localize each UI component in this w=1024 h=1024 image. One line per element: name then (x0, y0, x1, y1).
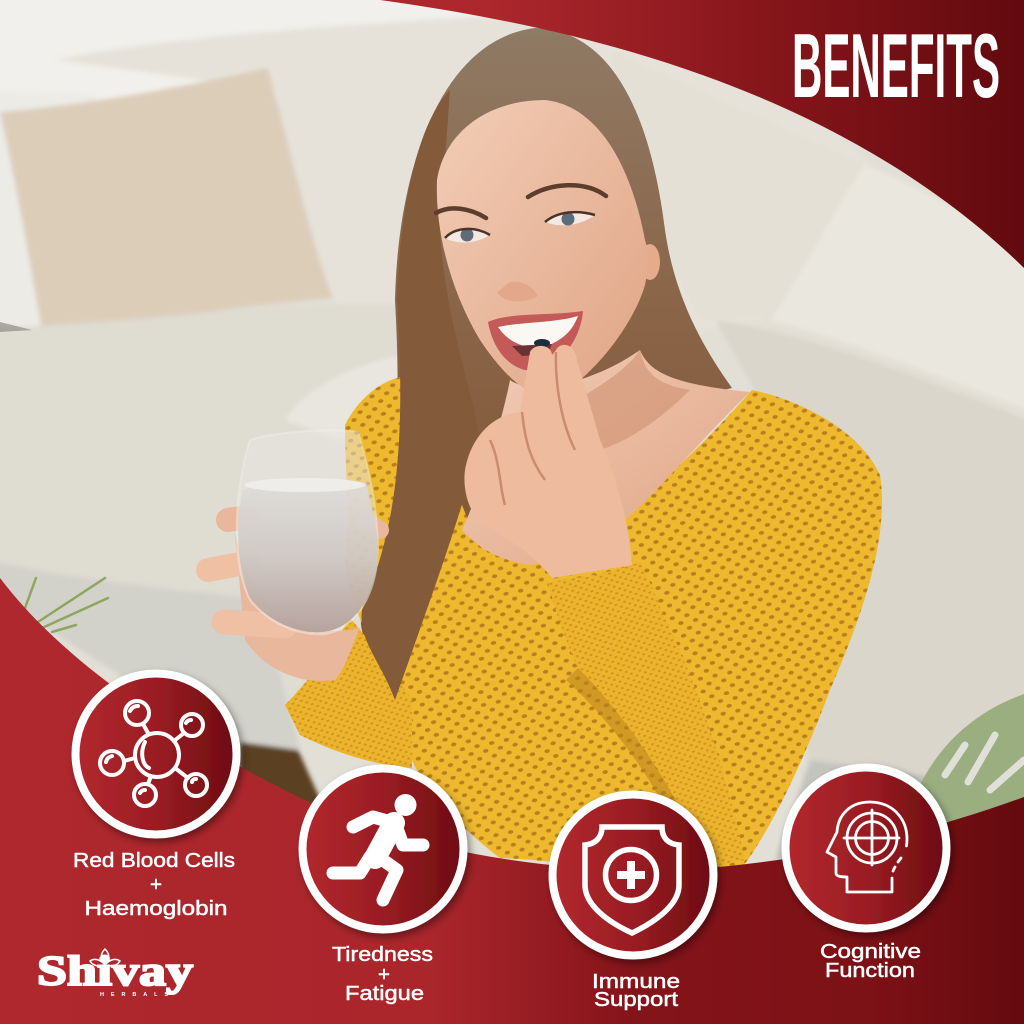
label: Cognitive Function (820, 940, 921, 982)
finger lines (490, 352, 575, 505)
benefit: immune support (552, 794, 714, 1011)
icon: blood cells (100, 701, 207, 806)
label: Red Blood Cells + Haemoglobin: Red Blood Cells (73, 849, 235, 872)
top right red banner (380, 0, 1024, 268)
badge: red blood cells (76, 674, 236, 834)
bottom red wave panel (0, 578, 1024, 1024)
woman (208, 28, 882, 870)
eyebrows (436, 185, 606, 218)
neck and chest (462, 350, 750, 565)
right sleeve cuff (548, 562, 675, 668)
sweater body (345, 375, 882, 870)
label: Tiredness + Fatigue (332, 943, 433, 1005)
icon: running person (333, 794, 423, 900)
label: Tiredness + Fatigue: Tiredness (332, 943, 433, 966)
mouth (488, 311, 583, 370)
face (437, 100, 648, 397)
label: Cognitive Function: Cognitive (820, 940, 921, 963)
label: Immune Support: Support (594, 988, 678, 1011)
label: Tiredness + Fatigue: Fatigue (345, 982, 424, 1005)
nose (497, 282, 538, 302)
label: Red Blood Cells + Haemoglobin (73, 849, 235, 920)
ear (640, 244, 660, 280)
logo: Shivay Herbals: HERBALS (100, 992, 168, 998)
benefit: red blood cells and haemoglobin (73, 674, 236, 920)
neck shadow (585, 350, 690, 450)
forearm fold on sweater (578, 570, 745, 868)
icon: lotus (90, 949, 120, 966)
badge: tiredness (302, 768, 464, 930)
plant leaf bottom left (25, 578, 108, 632)
hair left strand front (362, 90, 480, 700)
sweater sleeve left (285, 618, 412, 768)
icon: shield with plus (585, 827, 679, 933)
label: Tiredness + Fatigue: + (378, 963, 390, 986)
label: Red Blood Cells + Haemoglobin: Haemoglobin (84, 897, 228, 920)
label: Immune Support: Immune (592, 970, 680, 993)
label: Immune Support (592, 970, 680, 1011)
hand holding capsule (464, 345, 632, 578)
badge: immune support (552, 794, 714, 956)
glass of water (237, 430, 378, 634)
benefit: tiredness and fatigue (302, 768, 464, 1005)
monstera leaf bottom right (920, 694, 1024, 828)
glass holding hand (208, 517, 380, 681)
icon: head with target (827, 802, 907, 892)
badge: cognitive function (786, 768, 946, 928)
eyes (445, 212, 595, 243)
logo: Shivay Herbals: Shivay (37, 949, 193, 995)
hair back (361, 28, 732, 710)
benefit: cognitive function (786, 768, 946, 982)
label: Red Blood Cells + Haemoglobin: + (150, 873, 162, 896)
label: Cognitive Function: Function (825, 959, 915, 982)
